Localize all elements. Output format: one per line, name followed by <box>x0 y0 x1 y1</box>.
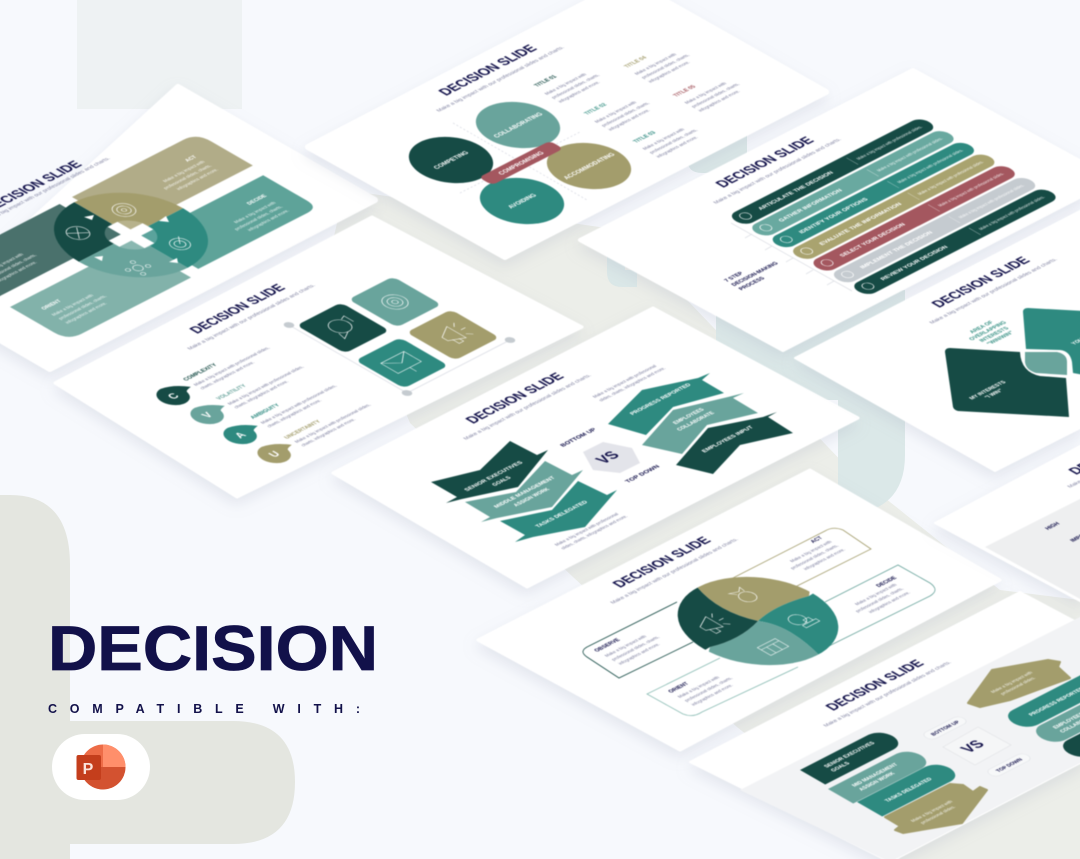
text: orient <box>40 290 114 324</box>
label: overlap: "WIN/WIN" <box>986 330 1016 346</box>
heading: DECISION SLIDE <box>822 658 927 713</box>
step 6: IMPLEMENT THE DECISION <box>859 231 935 270</box>
badge: PowerPoint: P <box>83 761 94 778</box>
text: observe: Make a big impact with <box>603 634 648 658</box>
callout: complexity <box>150 346 277 409</box>
text: title 02: TITLE 02 <box>583 103 609 116</box>
background shape: grey column and pill <box>0 495 295 859</box>
arrow: senior executives goals: GOALS <box>491 476 513 487</box>
text: observe: infographics and more. <box>617 642 661 665</box>
text: orient: professional slides, charts, <box>57 294 108 320</box>
text: title 03: infographics and more. <box>655 135 699 158</box>
arrow: employees collaborate <box>642 393 758 454</box>
text: title 01: TITLE 01 <box>533 74 559 88</box>
icon: decide <box>165 236 195 252</box>
outline: act <box>680 528 871 605</box>
arrow: progress reported <box>608 373 724 435</box>
node: accommodating <box>529 133 649 199</box>
step 3: Make a big impact with professional slides. <box>896 148 965 184</box>
step 3 <box>768 140 979 250</box>
arrow: progress reported: PROGRESS REPORTED <box>629 383 693 416</box>
text: orient: professional slides, charts, <box>683 676 734 702</box>
pill: top down: TOP DOWN <box>995 758 1025 773</box>
text: act: infographics and more. <box>802 548 846 571</box>
callout: uncertainty: UNCERTAINTY <box>283 419 323 440</box>
bar: tasks delegated <box>857 761 962 817</box>
bar: mid management: MID MANAGEMENT <box>851 762 900 788</box>
node: collaborating <box>458 92 578 158</box>
outline: decide <box>825 565 935 647</box>
arrow: senior executives goals <box>431 441 548 503</box>
arrow: bottom olive: professional slides. <box>919 805 957 825</box>
text: orient: infographics and more. <box>690 683 734 706</box>
arrow: middle management: MIDDLE MANAGEMENT <box>493 476 558 509</box>
text: title 05 <box>672 78 747 112</box>
arrow: tasks delegated <box>500 481 617 542</box>
callout: uncertainty: Make a big impact with professional slides, <box>293 403 372 444</box>
label: overlap: OVERLAPPING <box>968 320 1009 342</box>
arrow: senior executives goals: SENIOR EXECUTIVES <box>463 460 525 492</box>
shape: your interests <box>1023 308 1080 375</box>
subheading: Make a big impact with our professional slides and charts. <box>186 283 317 351</box>
subheading: Make a big impact with our professional slides and charts. <box>462 373 593 441</box>
node: collaborating: COLLABORATING <box>492 112 545 139</box>
panel: win-win slide <box>795 210 1080 471</box>
text: decide <box>847 576 912 617</box>
node: compromising <box>479 141 563 185</box>
outline: observe <box>583 602 693 678</box>
icon: money bag <box>728 586 761 604</box>
callout: volatility: VOLATILITY <box>215 384 249 401</box>
text: act: Make a big impact with <box>162 160 206 183</box>
hexagon: VS <box>583 442 640 473</box>
pill: bottom up: BOTTOM UP <box>930 720 962 737</box>
text: observe <box>593 631 667 665</box>
background shape: grey diagonal band <box>333 190 1080 859</box>
subheading: Make a big impact with our professional slides and charts. <box>609 537 740 605</box>
callout: complexity: charts, infographics and more. <box>199 361 256 390</box>
icon: chess piece <box>784 610 820 630</box>
step 1: ARTICULATE THE DECISION <box>757 171 836 211</box>
text: orient: Make a big impact with <box>676 675 721 699</box>
frame dots <box>282 321 517 397</box>
panel: top down vs bottom up alternate slide <box>690 592 1080 859</box>
icon: calendar <box>757 639 789 655</box>
heading: DECISION SLIDE <box>928 255 1033 310</box>
text: title 02 <box>583 97 657 131</box>
text: title 04: TITLE 04 <box>623 55 649 69</box>
panel: act <box>72 133 253 229</box>
text: title 03: TITLE 03 <box>632 131 658 144</box>
background shape: top pale block <box>77 0 242 109</box>
text: bottom up note: Make a big impact with professional <box>591 364 658 399</box>
tile: light teal <box>348 277 442 327</box>
label: process name: PROCESS <box>738 276 767 291</box>
panel: VUCA slide <box>55 217 582 497</box>
text: title 05: professional slides, charts, <box>690 82 741 108</box>
dashed axes <box>453 123 587 200</box>
text: title 01: Make a big impact with <box>543 72 588 96</box>
label: my interests: MY INTERESTS <box>968 380 1008 401</box>
text: title 05: infographics and more. <box>697 89 741 112</box>
box: VS <box>943 727 1011 765</box>
text: title 01: professional slides, charts, <box>550 73 601 99</box>
step 3: IDENTIFY YOUR OPTIONS <box>798 197 870 235</box>
pill: top down <box>985 752 1033 778</box>
outline: orient <box>647 658 798 716</box>
heading: DECISION SLIDE <box>186 282 289 336</box>
node: avoiding <box>462 168 582 234</box>
bar: tasks delegated: TASKS DELEGATED <box>884 777 934 803</box>
callout: uncertainty <box>251 403 378 467</box>
text: title 02: professional slides, charts, <box>600 101 651 127</box>
text: title 04: infographics and more. <box>647 60 691 83</box>
text: act: professional slides, charts, <box>162 164 213 190</box>
label: bottom up: BOTTOM UP <box>559 427 599 448</box>
text: act <box>782 536 847 574</box>
step 2: Make a big impact with professional slides. <box>875 137 944 172</box>
node: compromising: COMPROMISING <box>497 150 546 176</box>
node: avoiding: AVOIDING <box>506 193 539 210</box>
bar: employees input <box>1056 655 1080 761</box>
label: overlap: AREA OF <box>969 320 996 335</box>
text: title 04 <box>623 49 697 83</box>
text: act: Make a big impact with <box>789 540 833 563</box>
icon: act <box>107 201 141 219</box>
arrow: tasks delegated: TASKS DELEGATED <box>534 500 590 529</box>
arrow: employees input <box>676 412 793 474</box>
arrow: employees collaborate: COLLABORATE <box>676 411 717 432</box>
node: accommodating: ACCOMMODATING <box>562 152 617 181</box>
text: orient: ORIENT <box>40 299 64 311</box>
step 7 <box>849 187 1060 297</box>
subheading: Make a big impact with our professional slides and charts. <box>435 45 566 113</box>
bar: progress reported <box>1001 625 1080 731</box>
panel: conflict styles slide <box>308 0 826 257</box>
icons: loop arrows <box>84 215 178 263</box>
chart: swirl pie <box>676 576 840 666</box>
text: title 01 <box>533 69 607 103</box>
step 4: Make a big impact with professional slides. <box>916 160 985 196</box>
text: decide: Make a big impact with <box>854 583 898 606</box>
bar: mid management <box>828 748 933 804</box>
callout: ambiguity: AMBIGUITY <box>249 403 282 420</box>
callout: complexity: COMPLEXITY <box>182 363 219 382</box>
text: act <box>155 155 220 194</box>
panel: OODA loop slide <box>0 87 375 369</box>
text: title 03 <box>632 124 705 158</box>
matrix area <box>985 498 1080 600</box>
text: title 02: infographics and more. <box>607 108 651 131</box>
callout: uncertainty: charts, infographics and more. <box>300 418 357 447</box>
callout: ambiguity: Make a big impact with professional slides, <box>259 384 338 425</box>
text: title 02: Make a big impact with <box>593 100 638 124</box>
step 5: Make a big impact with professional slides. <box>937 172 1005 207</box>
bar: senior executives <box>800 729 905 785</box>
arrow: top olive <box>968 660 1070 707</box>
subheading: Make a big impact with our professional slides and charts. <box>712 137 843 205</box>
hexagon: VS: VS <box>593 449 624 466</box>
callout: uncertainty: U <box>266 449 284 459</box>
text: title 05: TITLE 05 <box>672 84 698 98</box>
callout: complexity: C <box>165 391 183 401</box>
heading: DECISION SLIDE <box>435 43 540 98</box>
bar: mid management: ASSIGN WORK <box>858 771 897 792</box>
step 7: REVIEW YOUR DECISION <box>880 245 950 282</box>
text: orient <box>667 672 740 706</box>
step 1 <box>727 117 938 226</box>
bar: employees collaborate <box>1029 640 1080 746</box>
panel: 7 step process slide <box>580 70 1080 350</box>
callout: volatility: charts, infographics and more. <box>233 380 290 409</box>
text: decide: DECIDE <box>875 576 899 588</box>
arrow: middle management <box>465 461 583 522</box>
step 7: Make a big impact with professional slides. <box>977 195 1046 231</box>
callout: volatility: Make a big impact with professional slides, <box>226 365 305 406</box>
step 6: Make a big impact with professional slides. <box>957 183 1026 219</box>
icon: observe <box>61 224 95 242</box>
arrow: employees input: EMPLOYEES INPUT <box>701 425 756 454</box>
heading: DECISION SLIDE <box>609 535 714 590</box>
tile: dark <box>296 303 390 353</box>
arrow: bottom olive <box>885 784 987 833</box>
icon: megaphone <box>693 613 734 635</box>
panel: matrix slide <box>935 421 1080 602</box>
box: VS: VS <box>958 738 989 755</box>
callout: complexity: Make a big impact with professional slides, <box>192 346 271 387</box>
step 5 <box>809 164 1020 273</box>
tile: teal <box>356 338 448 388</box>
text: bottom up note: slides, charts, infographics and more. <box>598 366 667 402</box>
arrow: employees collaborate: EMPLOYEES <box>672 407 706 425</box>
arrow: bottom olive: Make a big impact with <box>910 800 954 823</box>
compatibility caption: COMPATIBLE WITH: <box>48 702 360 716</box>
panel: observe <box>0 204 116 300</box>
text: orient: ORIENT <box>667 681 691 694</box>
text: act: professional slides, charts, <box>789 544 840 570</box>
arrow: top olive: Make a big impact with <box>990 671 1034 694</box>
badge: PowerPoint <box>52 734 150 800</box>
callout: volatility <box>184 365 311 428</box>
chart: quadrant circle <box>22 176 240 294</box>
step 6 <box>829 175 1040 285</box>
label: high: HIGH <box>1044 522 1062 531</box>
step 2 <box>747 129 958 238</box>
text: act: ACT <box>809 536 825 544</box>
label: process name: 7 STEP <box>723 271 745 283</box>
text: observe: OBSERVE <box>593 638 622 653</box>
text: title 03: professional slides, charts, <box>648 128 699 154</box>
text: decide: Make a big impact with <box>233 201 277 224</box>
tile: olive <box>406 310 500 360</box>
text: decide: professional slides, charts, <box>233 205 284 231</box>
text: observe: professional slides, charts, <box>610 635 661 661</box>
text: title 04: Make a big impact with <box>633 52 678 76</box>
arrow: top olive: professional slides. <box>999 676 1037 696</box>
text: title 04: professional slides, charts, <box>640 53 691 79</box>
callout: volatility: V <box>199 411 216 420</box>
text: decide <box>226 194 291 235</box>
step 4: EVALUATE THE INFORMATION <box>818 202 904 246</box>
label: overlap: INTERESTS <box>979 326 1011 343</box>
text: decide: professional slides, charts, <box>854 587 905 613</box>
heading: DECISION SLIDE <box>462 371 567 426</box>
pill: bottom up <box>921 715 969 741</box>
step 1: Make a big impact with professional slides. <box>855 125 924 161</box>
label: top down: TOP DOWN <box>624 464 662 484</box>
step 5: SELECT YOUR DECISION <box>839 223 907 258</box>
text: top down note: Make a big impact with professional <box>553 512 620 547</box>
callout: ambiguity: charts, infographics and more. <box>266 399 323 428</box>
bar: senior executives: SENIOR EXECUTIVES <box>823 741 877 769</box>
panel: top down vs bottom up slide <box>333 308 858 587</box>
main title: DECISION <box>48 614 378 684</box>
node: competing <box>391 127 511 193</box>
shape: overlap <box>1025 352 1067 375</box>
panel: decide <box>143 175 318 269</box>
connector bracket <box>731 223 852 291</box>
text: act: ACT <box>184 155 199 163</box>
step 4 <box>788 152 999 261</box>
arrow: middle management: ASSIGN WORK <box>513 487 552 508</box>
frame lines <box>289 325 510 393</box>
text: orient: Make a big impact with <box>50 293 95 317</box>
text: orient: infographics and more. <box>64 301 108 324</box>
panel: decision cycle slide <box>478 470 1000 750</box>
callout: ambiguity <box>217 384 344 448</box>
panel: orient <box>10 244 191 341</box>
text: top down note: slides, charts, infographics and more. <box>560 514 629 550</box>
node: competing: COMPETING <box>432 150 471 170</box>
text: decide: infographics and more. <box>867 591 911 614</box>
step 2: GATHER INFORMATION <box>778 188 844 223</box>
text: title 05: Make a big impact with <box>683 81 728 105</box>
callout: ambiguity: A <box>232 430 250 440</box>
text: decide: DECIDE <box>246 194 269 206</box>
shape: my interests <box>945 348 1069 417</box>
heading: DECISION SLIDE <box>712 135 817 190</box>
bar: senior executives: GOALS <box>830 761 852 773</box>
text: title 03: Make a big impact with <box>641 127 686 151</box>
text: act: infographics and more. <box>175 168 219 191</box>
label: process name: DECISION-MAKING <box>731 261 781 287</box>
icon: orient <box>119 258 157 278</box>
label: my interests: "I WIN" <box>984 388 1005 400</box>
text: title 01: infographics and more. <box>557 80 601 103</box>
background shape: pale teal blocks <box>607 120 905 515</box>
content backdrop <box>740 616 1080 859</box>
text: decide: infographics and more. <box>246 209 290 232</box>
subheading: Make a big impact with our professional slides and charts. <box>822 660 953 728</box>
subheading: Make a big impact with our professional slides and charts. <box>928 257 1059 325</box>
